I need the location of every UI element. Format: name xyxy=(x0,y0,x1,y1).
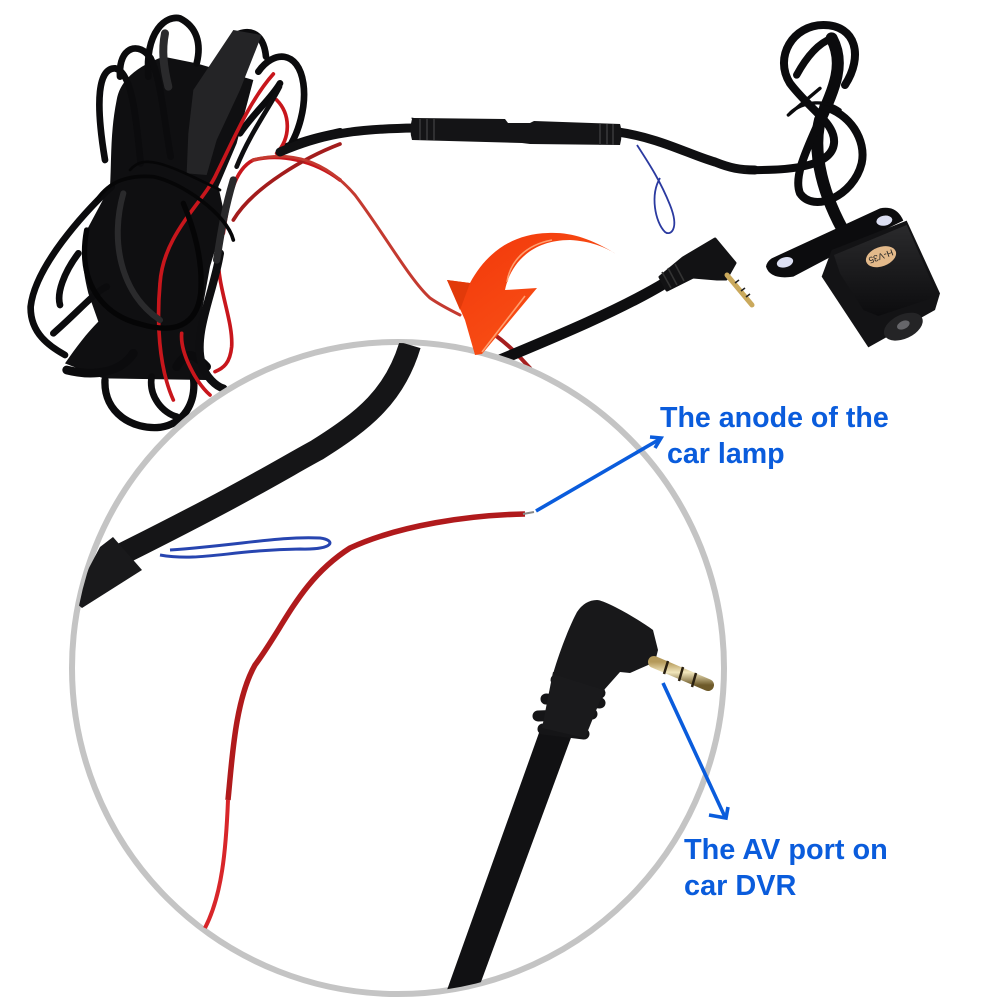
label: anode of the car lamp: car lamp xyxy=(667,438,785,470)
bracket holes xyxy=(776,255,794,269)
magnified view xyxy=(72,345,708,990)
thin red wire running to the lens xyxy=(253,156,530,368)
video cable with inline connectors xyxy=(280,118,755,170)
small blue loop xyxy=(637,145,674,233)
label sticker xyxy=(863,242,899,271)
small AV plug xyxy=(495,239,752,362)
cable left of connector xyxy=(280,128,415,152)
magnifier circle xyxy=(72,342,724,994)
magnified red wire xyxy=(228,514,525,800)
plug cable xyxy=(495,283,665,362)
magnified jack grommet ribs xyxy=(538,680,600,734)
cable bundle xyxy=(31,18,340,428)
camera top face xyxy=(834,225,935,316)
plug grommet ribs xyxy=(662,264,684,288)
plug head xyxy=(660,239,735,290)
black strands in front of the red xyxy=(85,87,280,388)
camera cable loops xyxy=(750,25,863,237)
lens xyxy=(880,307,927,346)
dark core of the bundle xyxy=(65,57,253,380)
arrow body xyxy=(447,233,616,355)
magnified jack head xyxy=(553,600,658,690)
inline connector xyxy=(410,118,622,145)
label: AV port on car DVR: car DVR xyxy=(684,870,797,902)
red wires xyxy=(159,74,340,400)
magnified jack neck xyxy=(542,672,605,730)
label: AV port on car DVR xyxy=(684,834,888,902)
pointer: car lamp anode xyxy=(536,437,661,511)
mounting bracket xyxy=(766,208,903,277)
orange curved arrow xyxy=(447,233,616,355)
rear view camera xyxy=(750,25,940,347)
flat inline module xyxy=(187,30,262,175)
wire tip xyxy=(523,512,534,514)
label: AV port on car DVR: The AV port on xyxy=(684,834,888,866)
pointer: AV port xyxy=(663,683,728,818)
cable right of connector xyxy=(618,132,755,170)
camera body xyxy=(822,221,940,347)
magnified blue loop xyxy=(160,538,330,557)
connector ribs xyxy=(420,119,613,145)
zip tie xyxy=(97,162,233,240)
magnified jack cable xyxy=(447,730,572,990)
label: anode of the car lamp: The anode of the xyxy=(660,402,889,434)
magnified thick cable xyxy=(118,345,410,556)
magnified jack pin xyxy=(654,662,708,685)
arrow fold shadow xyxy=(447,280,470,310)
sticker text: H-V35 xyxy=(867,247,895,265)
label: anode of the car lamp xyxy=(660,402,889,470)
arrow highlight xyxy=(507,240,552,282)
black loops xyxy=(31,18,340,428)
plug pin xyxy=(727,275,752,305)
magnified grommet xyxy=(72,537,142,608)
